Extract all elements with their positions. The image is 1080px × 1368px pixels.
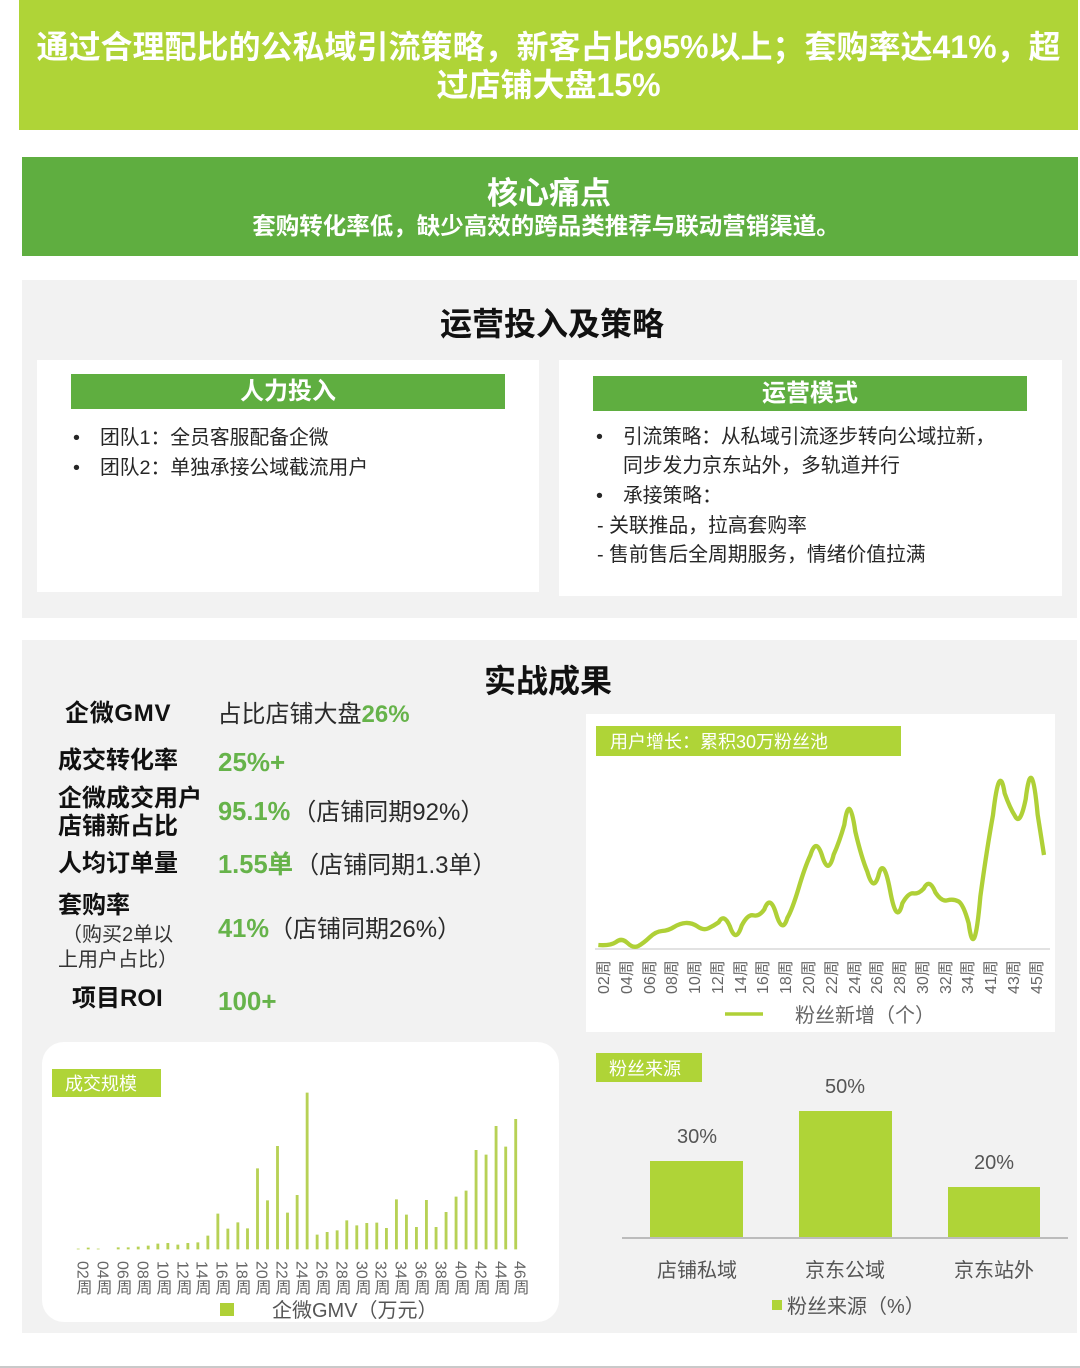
fan source tag: 粉丝来源 [609, 1059, 681, 1079]
week axis labels: 46周 [510, 1261, 530, 1296]
week axis labels: 06周 [642, 960, 659, 994]
week axis labels: 16周 [212, 1261, 232, 1296]
metric value: GMV: 占比店铺大盘26% [218, 701, 410, 728]
results heading: 实战成果 [484, 663, 612, 699]
metric value: ROI: 100+ [218, 986, 277, 1016]
chart card: user growth line chart [586, 714, 1055, 1032]
panel: operations input and strategy [22, 280, 1077, 618]
strategy detail 2: - 售前售后全周期服务，情绪价值拉满 [597, 544, 926, 566]
pain point heading: 核心痛点 [487, 176, 611, 211]
pain point description: 套购转化率低，缺少高效的跨品类推荐与联动营销渠道。 [252, 213, 840, 239]
week axis labels: 12周 [174, 1261, 192, 1296]
metric label: conversion: 成交转化率 [58, 747, 178, 774]
title banner [19, 0, 1078, 130]
week axis labels: 44周 [492, 1261, 510, 1296]
week axis labels: 20周 [801, 960, 818, 994]
week axis labels: 28周 [332, 1261, 352, 1296]
transaction tag: 成交规模 [65, 1074, 137, 1094]
week axis labels: 20周 [252, 1261, 272, 1296]
week axis labels [596, 960, 1046, 994]
metric label: new user share: 企微成交用户 [58, 785, 202, 812]
week axis labels: 32周 [372, 1261, 390, 1296]
bar: private domain 30%: 店铺私域 [657, 1259, 737, 1282]
week axis labels: 22周 [824, 960, 841, 994]
fan growth line [598, 778, 1044, 947]
fan source tag [596, 1053, 702, 1082]
week axis labels: 02周 [596, 960, 613, 994]
week axis labels: 22周 [272, 1261, 292, 1296]
week axis labels: 18周 [232, 1261, 252, 1296]
operating model header: 运营模式 [762, 380, 858, 407]
metric label: ROI: 项目ROI [72, 985, 163, 1012]
week axis labels [74, 1261, 530, 1296]
operating model header [593, 376, 1027, 411]
metric label: GMV: 企微GMV [65, 700, 171, 727]
title line 2: 过店铺大盘15% [436, 67, 661, 103]
metric value: orders per user: 1.55单（店铺同期1.3单） [218, 851, 497, 879]
core pain point band [22, 157, 1078, 256]
week axis labels: 02周 [74, 1261, 92, 1296]
week axis labels: 08周 [664, 960, 681, 994]
bar: JD off-site 20% [948, 1152, 1040, 1282]
week axis labels: 30周 [915, 960, 932, 994]
metric value: new user share: 95.1%（店铺同期92%） [218, 798, 484, 826]
title line 1: 通过合理配比的公私域引流策略，新客占比95%以上；套购率达41%，超 [36, 29, 1061, 65]
week axis labels: 26周 [312, 1261, 332, 1296]
week axis labels: 06周 [114, 1261, 132, 1296]
week axis labels: 30周 [352, 1261, 372, 1296]
transaction tag [52, 1069, 161, 1097]
strategy text continuation: 同步发力京东站外，多轨道并行 [623, 455, 900, 477]
metric value: repurchase: 41%（店铺同期26%） [218, 915, 461, 943]
manpower bullet 2: • 团队2：单独承接公域截流用户 [73, 457, 368, 479]
chart: fan sources [596, 1053, 1068, 1318]
bar: JD off-site 20%: 京东站外 [954, 1259, 1034, 1282]
growth chart legend: 粉丝新增（个） [795, 1004, 935, 1027]
week axis labels: 12周 [710, 960, 727, 994]
week axis labels: 45周 [1029, 960, 1046, 994]
week axis labels: 34周 [392, 1261, 410, 1296]
week axis labels: 26周 [869, 960, 886, 994]
growth chart tag [596, 726, 901, 756]
metric label note line 2: 上用户占比） [58, 949, 178, 971]
week axis labels: 04周 [619, 960, 636, 994]
GMV bars [78, 1093, 516, 1249]
manpower header [71, 374, 505, 409]
metric label note line 1: （购买2单以 [62, 924, 173, 946]
week axis labels: 10周 [154, 1261, 172, 1296]
week axis labels: 41周 [983, 960, 1000, 994]
card: manpower input [37, 360, 539, 592]
strategy detail 1: - 关联推品，拉高套购率 [597, 515, 807, 537]
bar: JD public domain 50%: 京东公域 [805, 1259, 885, 1282]
week axis labels: 04周 [94, 1261, 112, 1296]
week axis labels: 18周 [778, 960, 795, 994]
week axis labels: 28周 [892, 960, 909, 994]
chart card: transaction scale bar chart [42, 1042, 559, 1322]
metric label: new user share: 店铺新占比 [58, 813, 178, 840]
week axis labels: 32周 [938, 960, 955, 994]
operations heading: 运营投入及策略 [440, 306, 664, 342]
manpower bullet 1: • 团队1：全员客服配备企微 [73, 427, 329, 449]
bar: JD public domain 50%: 50% [825, 1076, 865, 1098]
panel: results [22, 640, 1077, 1333]
metric label: orders per user: 人均订单量 [58, 850, 178, 877]
strategy bullet: conversion: • 承接策略： [596, 485, 722, 507]
metrics table [58, 700, 497, 1016]
week axis labels: 24周 [292, 1261, 312, 1296]
manpower header: 人力投入 [240, 378, 336, 405]
bar chart legend: 企微GMV（万元） [272, 1299, 438, 1322]
metric label: new user share [58, 785, 202, 840]
bar: JD off-site 20%: 20% [974, 1152, 1014, 1174]
week axis labels: 42周 [472, 1261, 490, 1296]
week axis labels: 43周 [1006, 960, 1023, 994]
bar: private domain 30% [650, 1126, 743, 1282]
metric value: conversion: 25%+ [218, 747, 285, 777]
week axis labels: 36周 [412, 1261, 430, 1296]
week axis labels: 40周 [452, 1261, 470, 1296]
card: operating model [559, 360, 1062, 596]
week axis labels: 08周 [134, 1261, 152, 1296]
strategy bullet: traffic: • 引流策略：从私域引流逐步转向公域拉新， [596, 426, 995, 448]
growth chart tag: 用户增长：累积30万粉丝池 [610, 732, 828, 752]
week axis labels: 10周 [687, 960, 704, 994]
bar: JD public domain 50% [799, 1076, 892, 1282]
week axis labels: 34周 [960, 960, 977, 994]
bar: private domain 30%: 30% [677, 1126, 717, 1148]
week axis labels: 24周 [847, 960, 864, 994]
week axis labels: 16周 [755, 960, 772, 994]
week axis labels: 14周 [192, 1261, 212, 1296]
fan source legend: 粉丝来源（%） [787, 1295, 925, 1318]
metric label: repurchase: 套购率 [58, 892, 130, 919]
week axis labels: 14周 [733, 960, 750, 994]
week axis labels: 38周 [432, 1261, 450, 1296]
